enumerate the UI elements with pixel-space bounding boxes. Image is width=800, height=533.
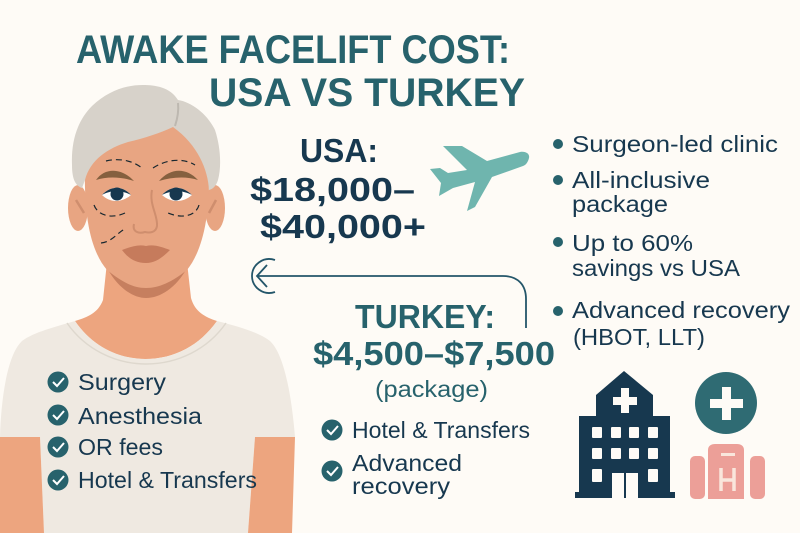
icon: medical cross	[695, 372, 757, 434]
Turkey price: TURKEY:	[355, 298, 495, 335]
surgical dashed lines	[94, 160, 199, 243]
Turkey price	[313, 298, 555, 402]
eyes	[102, 188, 131, 201]
neck	[75, 262, 217, 359]
benefit: advanced recovery: (HBOT, LLT)	[573, 324, 705, 350]
shirt	[0, 321, 295, 533]
title	[76, 28, 525, 115]
USA price: USA:	[300, 133, 378, 170]
illustration: woman portrait	[0, 85, 295, 533]
benefit: advanced recovery	[553, 297, 790, 350]
item: Advanced recovery: Advanced	[352, 450, 462, 476]
item: Surgery	[48, 369, 166, 395]
lips	[122, 245, 170, 263]
benefit: advanced recovery: Advanced recovery	[572, 297, 790, 323]
title: AWAKE FACELIFT COST:	[76, 28, 510, 72]
Turkey price: $4,500–$7,500	[313, 336, 555, 373]
benefits list	[553, 131, 790, 350]
item: Advanced recovery	[322, 450, 462, 499]
icon: hospital building	[575, 371, 675, 498]
USA price	[250, 133, 426, 246]
face	[85, 110, 209, 288]
USA price: $40,000+	[260, 209, 426, 246]
checklist: USA inclusions	[48, 369, 257, 493]
benefit: all-inclusive package: All-inclusive	[572, 167, 710, 193]
item: Advanced recovery: recovery	[352, 473, 450, 499]
USA price: $18,000–	[250, 172, 415, 209]
ears	[68, 185, 88, 231]
neck shadow	[107, 268, 187, 298]
eyebrows	[96, 171, 134, 181]
benefit: savings: Up to 60%	[572, 230, 693, 256]
benefit: savings: savings vs USA	[572, 255, 740, 281]
item: Hotel & Transfers: Hotel & Transfers	[78, 467, 257, 493]
benefit: all-inclusive package: package	[572, 191, 668, 217]
item: Surgery: Surgery	[78, 369, 166, 395]
item: OR fees: OR fees	[78, 434, 163, 460]
benefit: surgeon-led clinic: Surgeon-led clinic	[572, 131, 778, 157]
icon: suitcase with H	[690, 444, 765, 499]
benefit: all-inclusive package	[553, 167, 710, 217]
arms	[0, 437, 44, 533]
nose	[134, 190, 157, 233]
item: Anesthesia: Anesthesia	[78, 403, 203, 429]
hair	[72, 85, 220, 190]
Turkey price: (package)	[375, 376, 488, 402]
benefit: savings	[553, 230, 740, 281]
title: USA VS TURKEY	[209, 71, 525, 115]
checklist: Turkey inclusions	[322, 417, 530, 499]
item: Hotel & Transfers: Hotel & Transfers	[352, 417, 530, 443]
arrow: Turkey to USA	[252, 259, 526, 328]
icon: airplane	[430, 146, 529, 211]
